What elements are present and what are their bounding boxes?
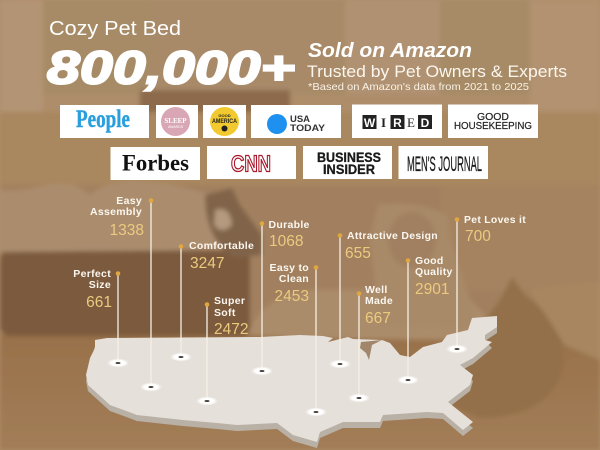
logo: USA Today: USA	[290, 114, 310, 125]
pin: Easy to Clean: 2453	[275, 288, 309, 305]
pin: Super Soft: 2472	[214, 321, 248, 338]
logo: Business Insider: BUSINESS	[317, 150, 381, 165]
pin: Durable: 1068	[269, 233, 303, 250]
pin: Good Quality: Good	[415, 255, 444, 267]
pin: Durable	[251, 219, 310, 376]
logo: Wired	[352, 104, 442, 138]
logo: Forbes: Forbes	[122, 150, 189, 176]
logo: CNN	[207, 146, 296, 179]
text: MEN'S JOURNAL	[407, 153, 482, 176]
pin: Perfect Size: Size	[89, 279, 111, 291]
pin: Easy Assembly	[90, 195, 162, 392]
pin: Easy to Clean	[270, 262, 327, 416]
pin: Pet Loves it: 700	[465, 228, 491, 245]
pin: Attractive Design: 655	[345, 245, 371, 262]
pin: Pet Loves it: Pet Loves it	[464, 214, 526, 226]
title: Cozy Pet Bed: Cozy Pet Bed	[49, 17, 181, 40]
pin: Durable: Durable	[268, 219, 310, 231]
logo: Good Morning America: AMERICA	[212, 119, 238, 125]
logo: Good Housekeeping	[448, 104, 538, 138]
pin: Well Made: Made	[365, 295, 393, 307]
pin: Pet Loves it	[446, 214, 526, 354]
logo: Sleep Awards: SLEEP	[164, 117, 187, 125]
pin: Easy to Clean: Clean	[279, 273, 309, 285]
logo: Wired: W	[364, 116, 376, 130]
pin: Perfect Size: 661	[86, 294, 112, 311]
pin: Comfortable	[170, 240, 254, 362]
logo: People	[60, 105, 149, 138]
logo: Good Housekeeping: HOUSEKEEPING	[454, 120, 532, 132]
pin: Easy Assembly: 1338	[110, 222, 144, 239]
logo: USA Today: TODAY	[290, 123, 326, 134]
logo: Wired: D	[421, 116, 430, 130]
logo: Sleep Awards: AWARDS	[168, 125, 184, 129]
pin: Well Made: 667	[365, 310, 391, 327]
footnote: *Based on Amazon's data from 2021 to 2025	[308, 81, 529, 93]
pin: Good Quality: 2901	[415, 281, 449, 298]
logo: Sleep Awards	[156, 105, 198, 138]
logo: USA Today	[251, 105, 341, 138]
pin: Super Soft: Super	[214, 295, 245, 307]
pin: Super Soft: Soft	[214, 307, 236, 319]
logo: Business Insider: INSIDER	[323, 162, 375, 177]
logo: Wired: R	[393, 116, 402, 130]
pin: Good Quality: Quality	[415, 266, 453, 278]
pin: Easy Assembly: Assembly	[90, 206, 142, 218]
pin: Perfect Size: Perfect	[73, 268, 111, 280]
pin: Well Made	[348, 284, 393, 402]
logo: Wired: E	[407, 115, 415, 130]
logo: Good Housekeeping: GOOD	[477, 111, 509, 123]
logo: CNN: CNN	[231, 150, 271, 176]
text: trusted by: Trusted by Pet Owners & Experts	[307, 62, 567, 81]
pin: Comfortable: 3247	[190, 255, 224, 272]
logo: Business Insider	[303, 146, 392, 179]
pin: Perfect Size	[73, 268, 129, 368]
pin: Easy to Clean: Easy to	[270, 262, 309, 274]
logo: Men's Journal	[398, 146, 488, 179]
subheading: Sold on Amazon: Sold on Amazon	[308, 40, 472, 62]
logo: Good Morning America: GOOD	[218, 113, 231, 118]
pin: Easy Assembly: Easy	[116, 195, 142, 207]
logo: People: People	[76, 106, 130, 133]
pin: Good Quality	[397, 255, 453, 384]
pin: Well Made: Well	[365, 284, 388, 296]
logo: Forbes	[110, 147, 200, 180]
logo: Wired: I	[381, 115, 386, 130]
pin: Attractive Design	[329, 230, 438, 368]
logo: Good Morning America	[203, 105, 246, 138]
pin: Super Soft	[196, 295, 248, 406]
map of United States	[86, 316, 497, 448]
headline number: 800,000+: 800,000+	[47, 42, 295, 94]
pin: Comfortable: Comfortable	[189, 240, 254, 252]
pin: Attractive Design: Attractive Design	[347, 230, 438, 242]
